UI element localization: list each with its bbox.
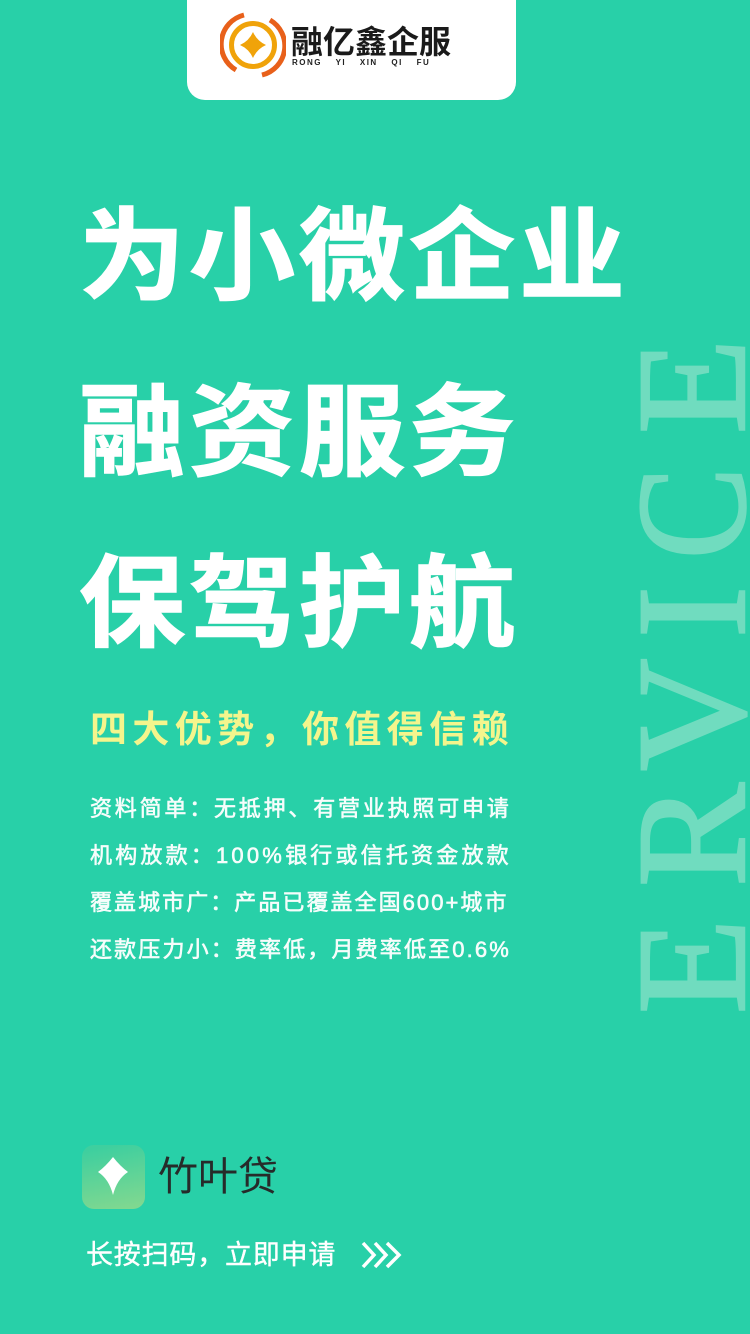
advantage 1: 资料简单：无抵押、有营业执照可申请 <box>90 796 512 821</box>
call to action: 长按扫码，立即申请 <box>86 1240 336 1270</box>
title line 2: 融资服务 <box>79 377 519 490</box>
icon: coin logo <box>220 12 286 78</box>
subheading: 四大优势，你值得信赖 <box>90 709 514 750</box>
icon: triple chevron arrow <box>362 1242 402 1268</box>
logo name: 融亿鑫企服 <box>291 24 451 60</box>
logo card <box>187 0 516 100</box>
advantage 4: 还款压力小：费率低，月费率低至0.6% <box>90 937 511 962</box>
brand name: 竹叶贷 <box>158 1155 278 1199</box>
title line 3: 保驾护航 <box>79 548 519 661</box>
icon: app logo <box>82 1145 145 1209</box>
advantage 3: 覆盖城市广：产品已覆盖全国600+城市 <box>90 890 509 915</box>
logo pinyin: RONG YI XIN QI FU <box>292 58 430 67</box>
advantage 2: 机构放款：100%银行或信托资金放款 <box>90 843 512 868</box>
background watermark: ERVICE <box>620 339 750 1014</box>
title line 1: 为小微企业 <box>79 201 629 314</box>
advantage list <box>90 796 512 962</box>
